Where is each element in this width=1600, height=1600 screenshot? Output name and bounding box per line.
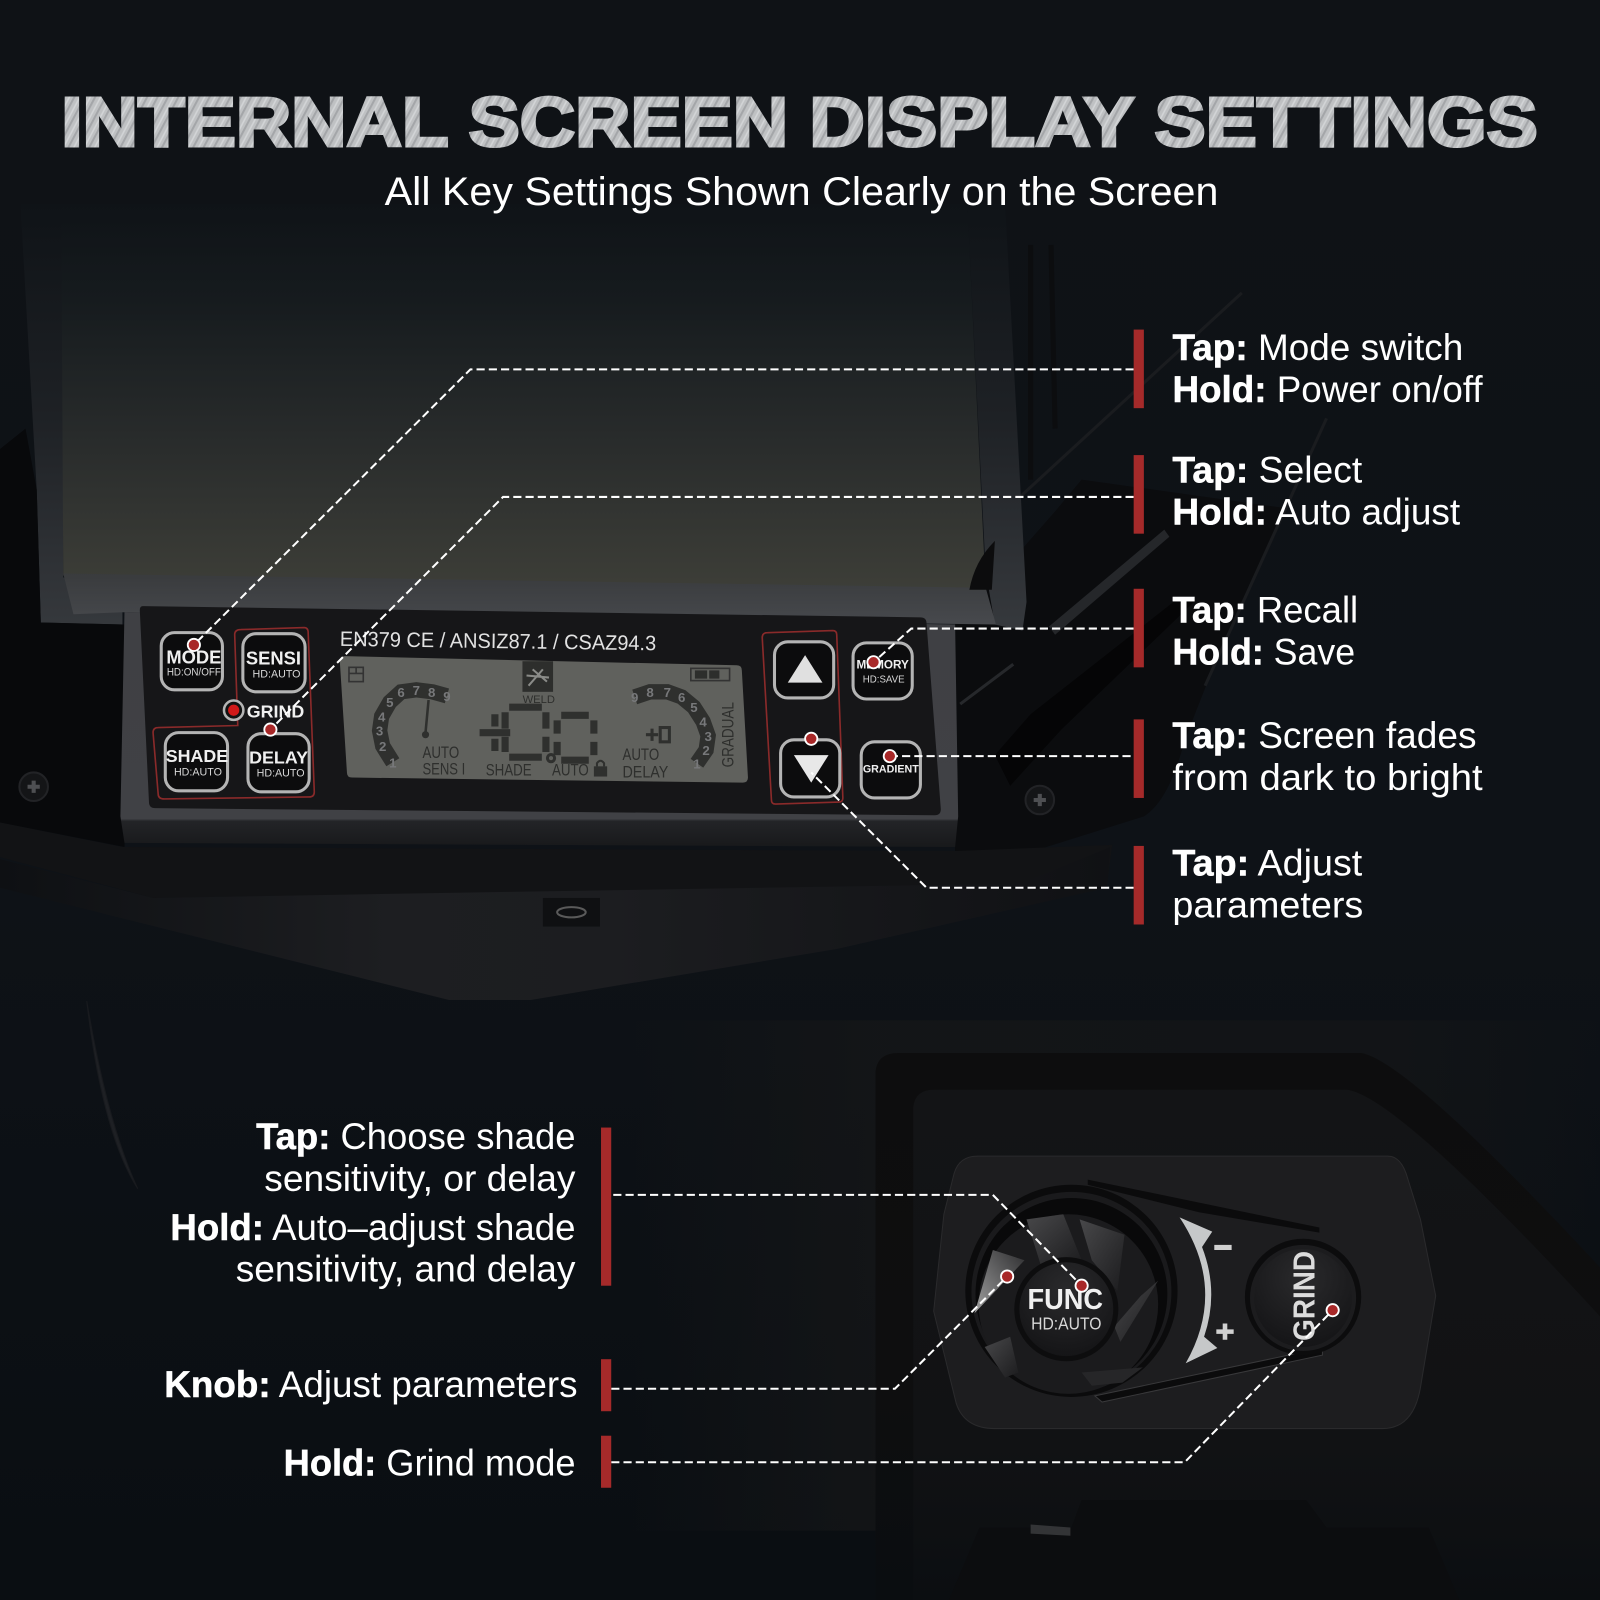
red outline: arrow button group [762, 631, 843, 804]
dial: auto sensitivity: 1 [389, 755, 397, 770]
LCD labels [422, 702, 738, 782]
button: SENSI [243, 634, 305, 692]
grind button [1245, 1239, 1361, 1355]
icon: weld mode: WELD [523, 694, 555, 706]
LCD labels: GRADUAL [720, 702, 738, 767]
callout: mode button [1134, 327, 1483, 410]
helmet lower band [0, 822, 1112, 898]
button: MODE [161, 633, 222, 690]
LCD labels: DELAY [622, 764, 668, 782]
button: SENSI: SENSI [246, 647, 301, 668]
dial: auto delay: 7 [664, 685, 671, 700]
LCD labels: SHADE [486, 762, 532, 780]
callout: memory button: Tap: Recall [1172, 589, 1358, 630]
callout: arrow buttons [1134, 843, 1363, 925]
button: SHADE [165, 733, 228, 791]
dial: auto sensitivity [376, 683, 451, 770]
right side helmet shell [955, 245, 1327, 873]
callout: FUNC button: Hold: Auto–adjust shade [170, 1207, 576, 1248]
external control plate [934, 1156, 1436, 1429]
dial: auto delay: 6 [678, 690, 685, 705]
LCD screen [340, 656, 748, 783]
button: SENSI: HD:AUTO [253, 669, 301, 681]
callout: memory button: Hold: Save [1172, 631, 1355, 672]
LCD display [340, 656, 748, 783]
red outline: left button group [153, 628, 314, 799]
title: INTERNAL SCREEN DISPLAY SETTINGS [61, 83, 1538, 161]
upper slot [1088, 1180, 1319, 1233]
dial: auto delay [631, 685, 712, 771]
leader lines: screen controls [194, 369, 1134, 888]
dial: auto sensitivity: 8 [428, 685, 435, 700]
dial: auto sensitivity: 9 [443, 689, 451, 704]
knob blades [974, 1214, 1158, 1386]
dial: auto delay: 1 [693, 756, 701, 771]
control panel [120, 606, 958, 847]
button: SHADE: HD:AUTO [174, 767, 222, 779]
button: GRADIENT [861, 742, 920, 798]
LCD labels: SENS I [422, 760, 465, 778]
button: MEMORY: MEMORY [856, 658, 909, 671]
icon: right screw [1026, 786, 1054, 814]
icon: left screw [19, 772, 48, 801]
button: DELAY: HD:AUTO [257, 768, 305, 780]
button: SHADE: SHADE [166, 746, 228, 766]
dial: auto delay: 2 [702, 743, 710, 758]
seven-segment shade reading [480, 707, 669, 760]
dial: auto sensitivity: 6 [397, 685, 405, 700]
button: DELAY: DELAY [249, 747, 308, 767]
function knob: FUNC [1028, 1284, 1103, 1316]
shell fill [955, 480, 1286, 873]
button: DELAY [248, 734, 309, 792]
minus sign [1214, 1245, 1232, 1250]
plate body [934, 1156, 1436, 1429]
dark side shadow [0, 429, 124, 847]
callout: memory button [1134, 589, 1358, 672]
callout: gradient button: Tap: Screen fades [1172, 715, 1477, 756]
auto-darkening lens [61, 204, 986, 590]
leader lines: external controls [611, 1195, 1333, 1462]
callout: mode button: Hold: Power on/off [1172, 369, 1483, 410]
button: GRADIENT: GRADIENT [863, 763, 919, 775]
callout: FUNC button: sensitivity, or delay [264, 1158, 576, 1199]
lower slot [1095, 1348, 1322, 1402]
callout: grind button: Hold: Grind mode [284, 1443, 576, 1484]
callout: sensitivity and delay buttons [1134, 450, 1460, 534]
callout: knob: Knob: Adjust parameters [164, 1364, 578, 1405]
dial: auto delay: 4 [699, 715, 707, 730]
dial: auto delay: 9 [631, 690, 638, 705]
dial: auto sensitivity: 7 [413, 683, 420, 698]
callout: gradient button: from dark to bright [1172, 757, 1483, 798]
icon: battery [691, 668, 730, 681]
dial: auto delay: 3 [704, 729, 712, 744]
standards text: EN379 CE / ANSIZ87.1 / CSAZ94.3 [340, 628, 656, 655]
helmet illustration: upper [0, 204, 1027, 847]
background warm glow [633, 1020, 1600, 1531]
function knob [965, 1185, 1178, 1397]
icon: small chin switch [543, 898, 600, 927]
icon: weld mode [522, 661, 555, 706]
dial: auto delay: 5 [690, 700, 698, 715]
button: MEMORY: HD:SAVE [863, 675, 905, 686]
indicator: GRIND LED [224, 701, 304, 721]
lens lower frame bar [63, 573, 996, 624]
LCD labels: AUTO [552, 762, 589, 780]
dial: auto sensitivity: 3 [376, 724, 383, 739]
gray diagonal band [1049, 530, 1169, 635]
button: MODE: MODE [166, 646, 221, 667]
callout: sensitivity and delay buttons: Hold: Auto adjust [1172, 491, 1460, 532]
button: MODE: HD:ON/OFF [167, 667, 221, 679]
dial: auto delay: 8 [646, 685, 654, 700]
LCD labels: AUTO [622, 746, 659, 764]
callout: gradient button [1134, 715, 1483, 798]
icon: memory slot [349, 667, 363, 682]
helmet chin shell [0, 847, 1110, 1000]
dial: auto sensitivity: 4 [378, 709, 386, 724]
callout: FUNC button [170, 1116, 611, 1290]
button: down arrow [781, 740, 840, 797]
indicator: GRIND LED: GRIND [247, 701, 304, 721]
adjustment arc arrow [1180, 1217, 1217, 1363]
black hook in frame [969, 541, 995, 590]
grind button: GRIND [1287, 1251, 1321, 1341]
function knob: HD:AUTO [1031, 1314, 1102, 1334]
shell ribs [960, 245, 1327, 704]
button: up arrow [774, 642, 834, 698]
callout: arrow buttons: Tap: Adjust [1172, 843, 1362, 884]
callout: mode button: Tap: Mode switch [1172, 327, 1463, 368]
LCD labels: AUTO [422, 744, 459, 762]
callout: FUNC button: Tap: Choose shade [256, 1116, 576, 1157]
callout: arrow buttons: parameters [1172, 884, 1363, 925]
helmet side frames [20, 204, 1027, 631]
device side dark panels [876, 1053, 1600, 1600]
callout marker dots [188, 639, 1339, 1316]
black diagonal band [995, 602, 1194, 786]
panel body [120, 612, 958, 847]
dial: auto sensitivity: 5 [386, 695, 393, 710]
subtitle: All Key Settings Shown Clearly on the Screen [385, 170, 1218, 214]
plus sign [1216, 1323, 1234, 1340]
faint left helmet edge [87, 1001, 138, 1189]
callout: FUNC button: sensitivity, and delay [236, 1249, 576, 1290]
button: MEMORY [853, 643, 912, 699]
icon: lock [594, 761, 607, 777]
callout: sensitivity and delay buttons: Tap: Select [1172, 450, 1362, 491]
dial: auto sensitivity: 2 [379, 739, 386, 754]
panel black face [140, 606, 941, 815]
